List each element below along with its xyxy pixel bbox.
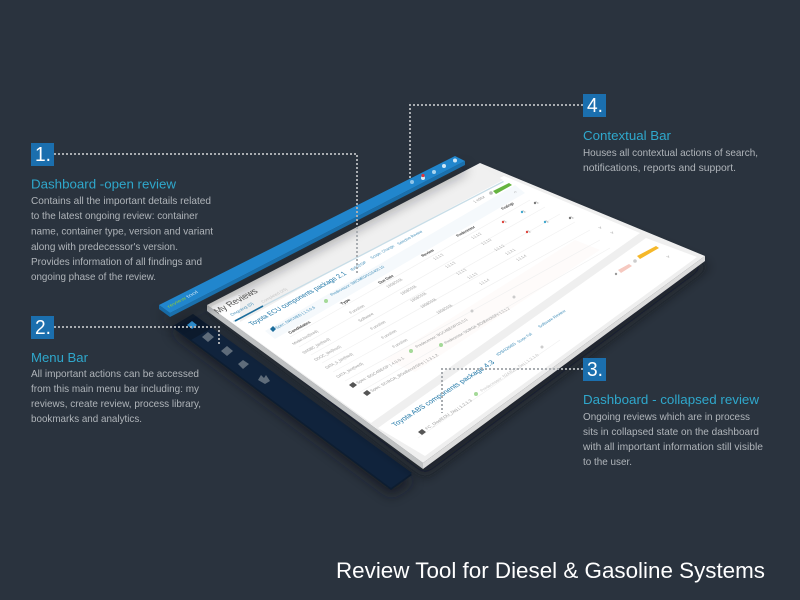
table: type column <box>339 298 409 349</box>
icon: reports <box>432 170 436 174</box>
callout 4: contextual bar <box>583 94 758 174</box>
table: candidates column <box>287 320 365 379</box>
open review heading: IDS02GP <box>349 261 368 272</box>
title: Review Tool for Diesel & Gasoline Systems <box>336 558 765 583</box>
body 3: to the user. <box>583 456 632 468</box>
table: findings column: 1 <box>569 215 576 220</box>
connector 4 <box>410 105 583 180</box>
open review controls: ^ <box>513 190 520 195</box>
table: due date column: 19/08/2016 <box>409 291 428 303</box>
body 1: Provides information of all findings and <box>31 256 202 268</box>
icon: create review <box>202 332 214 342</box>
body 4: notifications, reports and support. <box>583 162 736 174</box>
heading 2: Menu Bar <box>31 350 89 365</box>
table: reviewer column: 1.1.1.3 <box>444 261 457 269</box>
body 1: to the latest ongoing review: container <box>31 210 198 222</box>
body 1: ongoing phase of the review. <box>31 271 156 283</box>
spec row: BGC4BEOP: Predecessor: BGC4BEOP/15.0.0 <box>414 318 469 349</box>
logo: review <box>166 296 188 309</box>
heading 3: Dashboard - collapsed review <box>583 392 760 407</box>
badge 2: 2. <box>35 316 51 339</box>
table: type column: Function <box>348 304 366 315</box>
table: findings column <box>500 200 616 235</box>
bar front faces <box>159 305 170 317</box>
open review heading: Scope: Change <box>369 244 396 260</box>
open review controls <box>472 183 520 204</box>
spec row: SCIROA: Predecessor: SCIROA_BOsBenchSPe 1.3.1.2 <box>443 307 511 345</box>
connector 1 <box>54 154 357 275</box>
collapsed review status <box>615 246 672 275</box>
badge 4: 4. <box>587 94 603 117</box>
logo: tool <box>185 290 200 299</box>
body 3: sits in collapsed state on the dashboard <box>583 426 759 438</box>
icon: analytics <box>258 375 270 384</box>
tabs: Completed (25) <box>260 287 289 304</box>
table: predecessor column: Predecessor <box>455 225 476 238</box>
heading: My Reviews: My Reviews <box>212 287 261 316</box>
open review heading <box>247 230 424 327</box>
table: reviewer column: 1.1.1.3 <box>455 268 468 276</box>
open review controls: 1 editor <box>472 195 487 204</box>
collapsed review heading: Toyota ABS components package 4.3 <box>390 359 497 428</box>
collapsed review spec row <box>418 346 544 435</box>
body 2: All important actions can be accessed <box>31 368 199 380</box>
collapsed review heading: Software Review <box>537 309 567 329</box>
body 1: Contains all the important details related <box>31 195 211 207</box>
spec row: BGC4BEOP <box>349 310 474 388</box>
body 2: reviews, create review, process library, <box>31 398 201 410</box>
open review heading: Selective Review <box>396 230 424 246</box>
collapsed review spec row: FC_DiselEDU_Dej | 1.2.1.3 <box>424 398 473 431</box>
icon: process library <box>221 346 233 356</box>
table: findings column: 1 <box>526 229 533 234</box>
body 3: with all important information still visible <box>582 441 763 453</box>
table: due date column: Due Date <box>377 274 395 285</box>
row strip <box>265 185 525 339</box>
body 2: bookmarks and analytics. <box>31 413 142 425</box>
table: findings column: 1 <box>544 219 551 224</box>
collapsed review heading: Scope: Full <box>516 332 533 344</box>
table row lines <box>290 200 610 438</box>
body 4: Houses all contextual actions of search, <box>583 147 758 159</box>
spec row: SCIROA: Spec: SCIROA_BOsBenchSPe | 1.3.1.2 <box>369 353 440 393</box>
table: due date column: 19/08/2016 <box>435 303 454 315</box>
table: predecessor column: 1.1.2.1 <box>504 248 517 256</box>
connector 3 <box>442 369 583 413</box>
table: due date column: 19/08/2016 <box>385 277 404 289</box>
table: type column: Function <box>369 320 387 331</box>
table: findings column: v <box>597 225 604 230</box>
table: predecessor column <box>455 225 528 262</box>
spec row: Spec: SWCMED | 1.5.0.6 <box>274 306 317 330</box>
spec row: Predecessor: SWCMED/0115400.10 <box>329 265 386 297</box>
table: reviewer column: 1.1.1.3 <box>432 253 445 261</box>
table: candidates column: DOOC_bin(fixed) <box>313 345 343 362</box>
icon: settings <box>453 158 457 162</box>
body 4 <box>583 147 758 174</box>
table: findings column: Findings <box>500 201 515 211</box>
pink highlighted row <box>385 240 600 372</box>
badge 1: 1. <box>35 143 51 166</box>
callout 2: menu bar <box>31 316 201 425</box>
logo <box>166 290 200 309</box>
table: predecessor column: 1.1.1.0 <box>480 238 493 246</box>
table: type column: Software <box>357 312 375 323</box>
icon: support <box>442 164 446 168</box>
body 3 <box>582 411 763 468</box>
badge 3: 3. <box>587 358 603 381</box>
table: due date column: 19/08/2016 <box>419 297 438 309</box>
table: type column: Function <box>391 338 409 349</box>
spec row <box>270 265 386 332</box>
table: findings column: 1 <box>534 200 541 205</box>
open review card <box>212 176 640 423</box>
collapsed review heading <box>390 309 567 428</box>
header band <box>240 166 503 322</box>
collapsed review heading: IDS02085 <box>495 342 518 357</box>
table: reviewer column: Review <box>420 248 435 258</box>
table: candidates column: DATA_bin(fixed) <box>335 362 365 379</box>
body 1 <box>31 195 213 283</box>
panel: menu bar <box>171 314 414 496</box>
spec row: BGC4BEOP: Spec: BGC4BEOP | 4.0.0.1 <box>355 356 406 385</box>
body 2 <box>31 368 201 425</box>
collapsed review spec row: Predecessor: 02AB2D_Dej | 1.2.1.0 <box>479 353 540 393</box>
table: type column: Type <box>339 298 352 306</box>
callout 3: dashboard collapsed review <box>582 358 763 468</box>
panel: top contextual bar <box>159 156 465 326</box>
table: findings column: v <box>609 230 616 235</box>
table: candidates column: SWDBC_bin(fixed) <box>301 337 331 355</box>
table: candidates column: Candidates <box>287 320 312 335</box>
table: due date column <box>377 274 454 315</box>
table: predecessor column: 1.1.1.4 <box>515 254 528 262</box>
panel: dashboard sheet <box>207 163 710 478</box>
icon: my reviews <box>187 321 197 329</box>
heading 1: Dashboard -open review <box>31 176 177 192</box>
table: reviewer column: 1.1.1.4 <box>478 278 491 286</box>
body 1: name, container type, version and variant <box>31 226 213 238</box>
icon: notifications <box>421 174 425 180</box>
table: reviewer column: 1.1.1.3 <box>466 272 479 280</box>
spec row: SCIROA <box>363 296 516 396</box>
collapsed review card <box>378 238 697 456</box>
body 1: along with predecessor's version. <box>31 241 178 253</box>
sheet edges <box>207 256 705 469</box>
collapsed review status: v <box>665 254 672 259</box>
table: findings column: 1 <box>521 209 528 214</box>
body 3: Ongoing reviews which are in process <box>583 411 750 423</box>
table: candidates column: Model.bin(fixed) <box>291 329 320 346</box>
heading 4: Contextual Bar <box>583 128 672 143</box>
open review heading: Toyota ECU components package 2.1 <box>247 270 349 327</box>
icon: bookmarks <box>238 360 249 369</box>
table: findings column: 1 <box>502 219 509 224</box>
table: reviewer column <box>420 248 491 286</box>
table: due date column: 19/08/2016 <box>399 284 418 296</box>
table: type column: Function <box>380 329 398 340</box>
tabs <box>229 287 289 321</box>
connector 2 <box>54 327 219 345</box>
tabs: Ongoing (0) <box>229 302 255 317</box>
table: predecessor column: 1.1.1.2 <box>470 232 483 240</box>
body 2: from this main menu bar including: my <box>31 383 200 395</box>
callout 1: dashboard open review <box>31 143 213 283</box>
table: candidates column: DATA_S_bin(fixed) <box>324 352 354 370</box>
table: predecessor column: 1.1.1.2 <box>493 244 506 252</box>
icon: search <box>410 180 414 184</box>
